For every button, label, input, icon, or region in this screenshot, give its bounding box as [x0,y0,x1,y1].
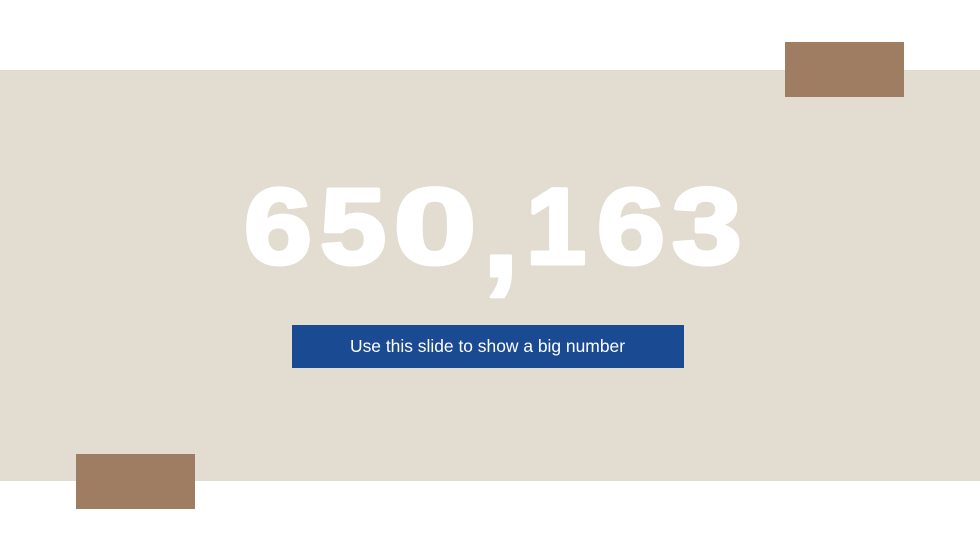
caption bar [292,325,684,368]
big number: , [482,154,520,305]
big number: 6 [597,167,665,287]
accent rectangle: bottom left [76,454,195,509]
caption text: Use this slide to show a big number [350,336,625,356]
big number [244,154,742,305]
big number: 3 [672,166,742,287]
big number: 0 [394,166,476,287]
accent rectangle: top right [785,42,904,97]
big number: 6 [244,167,312,287]
big number: 5 [320,166,386,287]
background band [0,70,980,481]
big number: 1 [526,166,586,286]
